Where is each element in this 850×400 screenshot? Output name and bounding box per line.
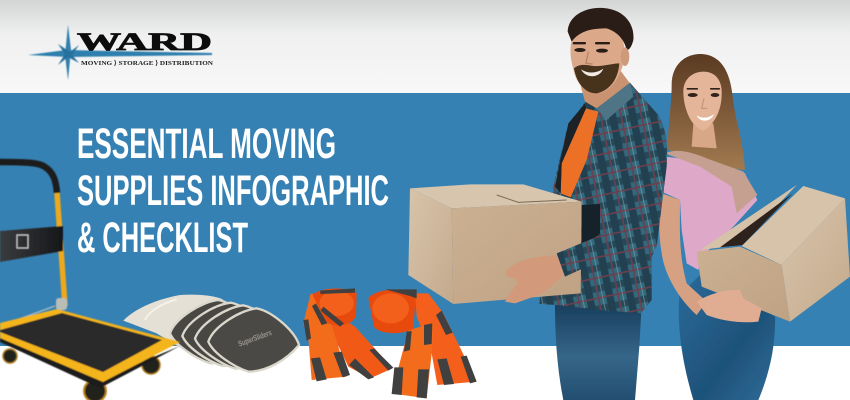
- trolley handle: [0, 162, 57, 193]
- woman left arm: [659, 193, 707, 315]
- man sleeve: [557, 120, 664, 277]
- man collar: [597, 83, 633, 120]
- man orange tee: [561, 108, 598, 197]
- man face: [571, 27, 625, 93]
- trolley deck mat: [0, 313, 162, 372]
- trolley deck frame: [0, 309, 180, 382]
- man beard: [574, 63, 619, 93]
- box held by man: [408, 184, 582, 304]
- furniture sliders: [123, 295, 299, 372]
- right strap: [368, 289, 477, 398]
- box front: [452, 202, 582, 304]
- woman: [659, 54, 775, 400]
- logo wordmark: WARD: [77, 29, 212, 56]
- slider brand mark: SuperSliders: [237, 328, 273, 349]
- box front face: [697, 247, 790, 322]
- dark slider 2: [182, 303, 273, 366]
- woman scarf: [665, 151, 757, 213]
- title line 3: & CHECKLIST: [77, 214, 248, 262]
- man: [539, 8, 667, 400]
- trolley underside: [0, 334, 180, 388]
- man hair: [568, 8, 633, 50]
- title line 2: SUPPLIES INFOGRAPHIC: [77, 167, 389, 215]
- left strap: [303, 288, 393, 381]
- man hand: [505, 255, 564, 303]
- woman face: [683, 72, 722, 131]
- dark slider 1: [170, 300, 261, 363]
- background: blue band: [0, 93, 850, 346]
- title: [77, 120, 389, 262]
- man neck: [580, 70, 630, 108]
- lifting straps: [303, 288, 477, 398]
- shadow under box on shirt: [582, 204, 600, 248]
- logo tagline: MOVING ⟩ STORAGE ⟩ DISTRIBUTION: [81, 59, 213, 67]
- title line 1: ESSENTIAL MOVING: [77, 120, 336, 168]
- woman neck: [692, 123, 717, 148]
- box right side: [782, 198, 850, 322]
- woman jeans: [679, 273, 775, 400]
- icon: compass star: [28, 25, 212, 80]
- box left side: [408, 188, 453, 304]
- dark slider 4: [208, 308, 299, 372]
- box top: [410, 184, 582, 208]
- woman hair back: [668, 54, 745, 170]
- man jeans: [555, 305, 642, 400]
- logo: Ward Moving Storage Distribution: [28, 25, 213, 80]
- cream sliders: [123, 295, 233, 347]
- box opening shadow: [720, 193, 793, 247]
- trolley pole: [57, 193, 65, 306]
- dark slider 3: [195, 305, 286, 369]
- box rear flap: [700, 185, 797, 250]
- trolley wheels: [3, 349, 160, 400]
- platform trolley: [0, 162, 180, 400]
- box top flap: [742, 186, 845, 265]
- woman hand: [697, 290, 762, 322]
- man shirt: [539, 83, 667, 313]
- box held by woman: [697, 185, 850, 322]
- crossbar badge: [17, 235, 28, 248]
- man ear: [621, 47, 629, 66]
- man dark inner shirt: [555, 103, 586, 193]
- background: light top strip: [0, 0, 850, 93]
- couple with boxes: [408, 8, 850, 400]
- trolley hinge: [56, 298, 67, 310]
- trolley crossbar: [0, 226, 63, 262]
- woman pink top: [662, 157, 757, 270]
